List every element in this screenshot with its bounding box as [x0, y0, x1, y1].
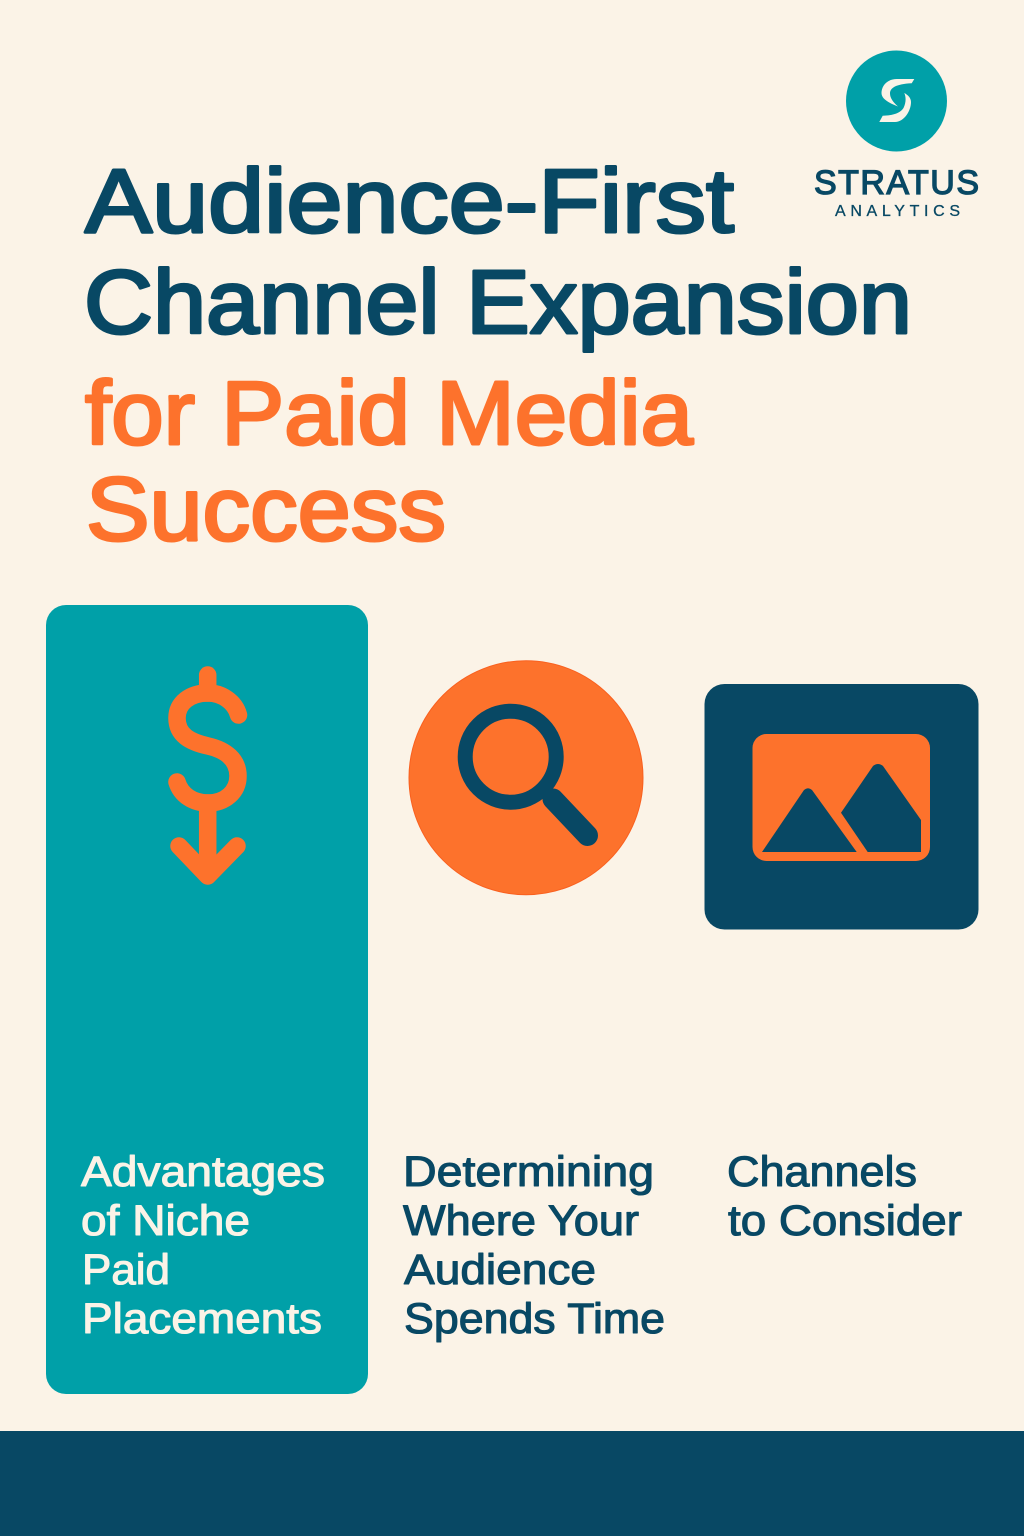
panel label	[403, 1148, 665, 1343]
panel label	[727, 1148, 962, 1245]
icon: logo circle	[846, 50, 947, 152]
panel label: Placements	[82, 1295, 322, 1343]
panel label: to Consider	[728, 1197, 962, 1245]
footer band	[0, 1431, 1024, 1536]
panel label: Channels	[727, 1148, 917, 1196]
panel: channels to consider	[704, 684, 978, 1245]
title line 3: for Paid Media	[85, 364, 694, 464]
icon: dollar sign with down arrow	[177, 675, 238, 876]
title	[84, 152, 912, 560]
panel: determining where your audience spends time	[403, 661, 665, 1343]
panel label: Audience	[404, 1246, 596, 1294]
panel label	[81, 1148, 325, 1343]
icon: magnifying glass in orange circle	[409, 661, 643, 895]
panel: advantages of niche paid placements	[46, 605, 368, 1394]
panel label: Determining	[403, 1148, 654, 1196]
logo: Stratus Analytics	[814, 50, 979, 220]
title line 2: Channel Expansion	[84, 253, 912, 353]
panel label: Paid	[82, 1246, 170, 1294]
title line 1: Audience-First	[85, 152, 734, 252]
logo wordmark: STRATUS	[814, 164, 979, 202]
panel label: Advantages	[81, 1148, 325, 1196]
panel label: of Niche	[81, 1197, 250, 1245]
logo subtitle: ANALYTICS	[835, 203, 960, 220]
panel label: Spends Time	[404, 1295, 665, 1343]
title line 4: Success	[86, 460, 446, 560]
icon: image placeholder in navy square	[704, 684, 978, 930]
panel label: Where Your	[403, 1197, 639, 1245]
